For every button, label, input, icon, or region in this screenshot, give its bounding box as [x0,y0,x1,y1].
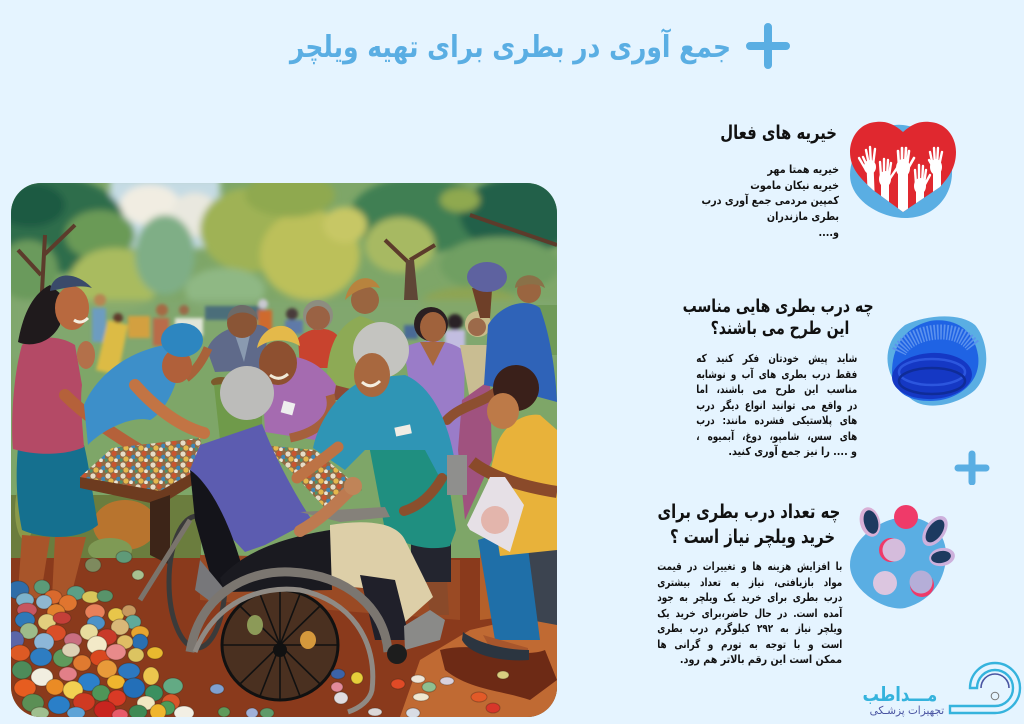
pile of colorful bottle caps [6,551,509,721]
text block: suitable caps explanation: مناسب این طرح می باشند، اما [696,383,857,396]
text block: suitable caps explanation: های پلاستیکی فشرده مانند: درب [696,414,857,427]
logo: Madateb medical equipment [862,662,1022,717]
woman in pink shirt and teal skirt [12,276,138,600]
text block: number of caps explanation: آمده است. در حال حاضر،برای خرید یک [657,606,842,620]
text block: number of caps explanation: مواد بازیافتی، نیاز به تعداد بیشتری [657,576,842,588]
text block: number of caps explanation: درب بطری برای خرید یک ویلچر به جود [657,591,842,604]
gray-haired man in background [186,305,269,440]
title: جمع آوری در بطری برای تهیه ویلچر [290,30,731,65]
man in blue shirt [447,262,557,420]
text block: suitable caps explanation: و .... را نیز جمع آوری کنید. [728,445,857,458]
text block: number of caps explanation: است و با توجه به تورم و گرانی ها [657,638,842,650]
text block: suitable caps explanation: در واقع می توانید انواع دیگر درب [696,398,857,412]
logo name: مـــداطب [862,682,937,706]
heading: number of caps: خرید ویلچر نیاز است ؟ [670,526,835,548]
background crowd [92,294,465,375]
heading: suitable caps: چه درب بطری هایی مناسب [683,296,874,317]
text block: charity list: کمپین مردمی جمع آوری درب [701,194,839,207]
woman in purple dress [404,307,492,520]
heading: suitable caps: این طرح می باشند؟ [711,318,849,339]
illustration: people collecting bottle caps [11,183,557,717]
heading: suitable caps [683,296,874,339]
text block: number of caps explanation: با افزایش هزینه ها و تغییرات در قیمت [657,560,842,573]
text block: number of caps explanation [657,560,842,666]
icon: heart with raised hands [850,122,956,218]
heading: number of caps [657,501,840,548]
text block: suitable caps explanation: شاید پیش خودتان فکر کنید که [696,352,857,365]
text block: charity list: خیریه نیکان ماموت [750,179,839,192]
older woman with teal shirt and apron [297,322,467,615]
text block: suitable caps explanation [696,352,857,458]
person in wheelchair [140,366,445,712]
mid-ground plants and table area [11,480,557,724]
text block: charity list: خیریه همتا مهر [767,163,839,176]
text block: suitable caps explanation: های سس، شامپو، دوغ، آبمیوه ، [696,430,857,442]
logo mark [948,662,1022,714]
man with green shirt and hat [327,278,395,400]
logo tagline: تجهیزات پزشـکی [870,704,944,717]
table covered in bottle caps [80,438,362,565]
text block: number of caps explanation: ممکن است این رقم بالاتر هم رود. [680,653,842,666]
text block: charity list [701,163,839,239]
icon: small plus [954,450,990,485]
far right man [515,275,557,355]
text block: charity list: بطری مازندران [767,210,839,223]
painting background: trees and sky [0,173,580,717]
icon: blue bottle cap [888,316,986,406]
heading: active charities: خیریه های فعال [720,122,837,144]
icon: large plus [746,23,790,69]
text block: number of caps explanation: ویلچر نیاز به ۲۹۲ کیلوگرم درب بطری [657,622,842,635]
woman in red [298,300,338,368]
icon: floating bottle caps [850,505,955,608]
heading: number of caps: چه تعداد درب بطری برای [657,501,840,523]
text block: charity list: و.... [819,226,839,239]
text block: suitable caps explanation: فقط درب بطری های آب و نوشابه [696,368,857,380]
woman with yellow scarf [257,326,336,440]
person in yellow shirt with plastic bag [462,365,557,660]
person in blue bending over table [84,323,204,445]
